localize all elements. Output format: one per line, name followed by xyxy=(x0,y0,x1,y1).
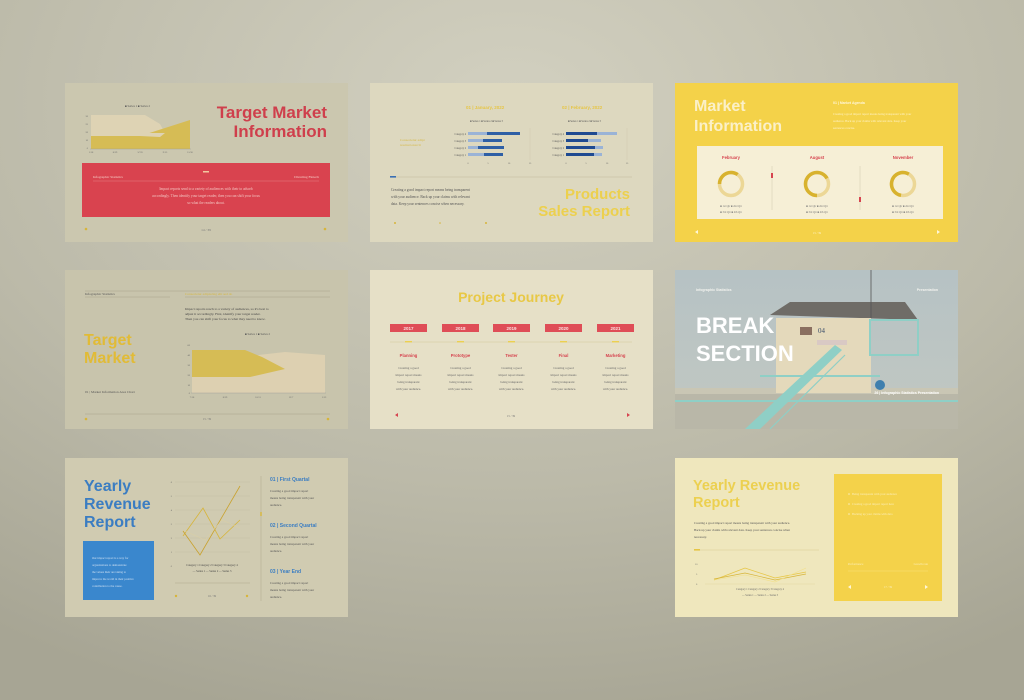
slide: target market xyxy=(65,270,348,429)
slide: yearly revenue report yellow: Creating a good impact report means being transparent with your audience. xyxy=(694,521,790,525)
bar charts: Category 4 xyxy=(553,133,565,136)
area chart: ■ Series 1 ■ Series 2 xyxy=(245,332,271,336)
red panel: Infographic Statistics xyxy=(93,175,123,179)
area chart: 20 xyxy=(188,374,191,377)
donut panel: February xyxy=(722,155,741,160)
timeline: Creating a good xyxy=(501,366,522,370)
line chart: Category 1 Category 2 Category 3 Category 4 xyxy=(186,564,238,567)
slide: target market: Then you can shift your focus to what they need to know. xyxy=(185,317,266,321)
line chart: 6 xyxy=(171,481,173,484)
line chart: Category 1 Category 2 Category 3 Category 4 xyxy=(736,588,785,591)
area chart: 10 xyxy=(86,139,89,142)
donut panel: ■ 3rd Qtr ■ 4th Qtr xyxy=(892,211,914,214)
area chart: 60 xyxy=(188,344,191,347)
yellow box: Being transparent with your audience xyxy=(852,492,898,496)
slide: market information: 01 | Market Agenda xyxy=(833,101,865,105)
quarters text xyxy=(270,477,317,599)
bar charts: 10 xyxy=(508,162,511,165)
timeline: impact report means xyxy=(550,373,577,377)
donut panel xyxy=(697,146,943,219)
timeline: impact report means xyxy=(602,373,629,377)
slide: break section photo: SECTION xyxy=(696,341,794,366)
timeline: Marketing xyxy=(606,353,626,358)
timeline: being transparent xyxy=(604,380,627,384)
blue box: improve the world in their positive xyxy=(92,577,134,581)
bar charts: 5 xyxy=(487,162,489,165)
bar charts: 02 | February, 2022 xyxy=(562,105,603,110)
timeline: Planning xyxy=(400,353,418,358)
slide: break section photo: 26 | Infographic Statistics Presentation xyxy=(874,391,939,395)
timeline: being transparent xyxy=(449,380,472,384)
red panel: Diverting Fintech xyxy=(294,175,319,179)
line chart xyxy=(695,563,815,597)
slide: target market: adjust it accordingly. First, identify your target reader. xyxy=(185,312,261,317)
area chart: 10 xyxy=(188,384,191,387)
area chart: 1/18 xyxy=(89,151,94,154)
area chart: 25 xyxy=(86,123,89,126)
slide: market information xyxy=(675,83,958,242)
yellow box: Performance xyxy=(848,562,864,566)
slide: market information: Creating a good impact report means being transparent with your xyxy=(833,112,911,116)
donut panel: ■ 3rd Qtr ■ 4th Qtr xyxy=(806,211,828,214)
blue box: organizations to demonstrate xyxy=(92,563,127,567)
timeline: Creating a good xyxy=(605,366,626,370)
title: Market xyxy=(694,98,746,115)
line chart: 5 xyxy=(171,495,173,498)
area chart: 8/29 xyxy=(113,151,118,154)
area chart: 8/29 xyxy=(223,396,228,399)
line chart: 5 xyxy=(696,573,698,576)
area chart: 10/11 xyxy=(255,396,262,399)
area chart: 20 xyxy=(86,131,89,134)
timeline: impact report means xyxy=(447,373,474,377)
slide: break section photo: Infographic Statistics xyxy=(696,288,732,292)
slide: break section photo: Presentation xyxy=(917,288,938,292)
timeline: with your audience. xyxy=(396,387,421,391)
slide: project journey xyxy=(370,270,653,429)
line chart: 0 xyxy=(171,565,173,568)
timeline: Tester xyxy=(505,353,518,358)
yellow box: Creating a good impact report here xyxy=(852,502,895,506)
timeline: being transparent xyxy=(500,380,523,384)
area chart: 30 xyxy=(86,115,89,118)
yellow box: Growth rate xyxy=(914,562,929,566)
timeline: with your audience. xyxy=(603,387,628,391)
bar charts: ■ Series 1 ■ Series 2 ■ Series 3 xyxy=(568,120,601,123)
bar charts: 0 xyxy=(565,162,567,165)
slide: yearly revenue report yellow xyxy=(675,458,958,617)
area chart: 9/15 xyxy=(163,151,168,154)
quarters text: audience. xyxy=(270,503,282,507)
slide: break section photo xyxy=(675,270,958,429)
title: Yearly Revenue xyxy=(693,478,800,494)
bar charts: ■ Series 1 ■ Series 2 ■ Series 3 xyxy=(470,120,503,123)
donut panel: ■ 3rd Qtr ■ 4th Qtr xyxy=(720,211,742,214)
quarters text: audience. xyxy=(270,549,282,553)
line chart: 10 xyxy=(695,563,698,566)
timeline: 2018 xyxy=(455,326,466,331)
timeline: 2020 xyxy=(558,326,569,331)
slide: target market: Market xyxy=(84,350,136,367)
bar charts: Consectetur adipi xyxy=(400,138,425,142)
bar charts: Category 3 xyxy=(455,140,467,143)
quarters text: audience. xyxy=(270,595,282,599)
slide: yearly revenue report yellow: Back up your claims with relevant data. Keep your sentences concise when xyxy=(694,528,790,532)
red panel: Impact reports send to a variety of audiences with their to adsorb xyxy=(159,187,253,191)
line chart: 2 xyxy=(171,537,173,540)
yellow box: Backing up your claims with data xyxy=(852,512,893,516)
area chart: 7/18 xyxy=(190,396,195,399)
slide: market information: 15 / 39 xyxy=(813,231,822,235)
slide: products sales report: data. Keep your sentences concise when necessary. xyxy=(391,202,465,206)
bar charts xyxy=(400,105,629,165)
slide: yearly revenue report blue xyxy=(65,458,348,617)
bar charts: Category 2 xyxy=(553,147,565,150)
donut panel: ■ 1st Qtr ■ 2nd Qtr xyxy=(806,205,828,208)
slide: target market: Consectetur adipiscing elit sed do xyxy=(185,292,232,296)
quarters text: Creating a good impact report xyxy=(270,581,308,585)
quarters text: Creating a good impact report xyxy=(270,489,308,493)
timeline: impact report means xyxy=(498,373,525,377)
slide: products sales report: with your audience. Back up your claims with relevant xyxy=(391,195,470,199)
slide: target market information xyxy=(65,83,348,242)
blue box: Our impact report is a way for xyxy=(92,556,128,560)
slide: yearly revenue report blue: Revenue xyxy=(84,496,151,513)
timeline: impact report means xyxy=(395,373,422,377)
timeline: 2021 xyxy=(610,326,621,331)
timeline: being transparent xyxy=(552,380,575,384)
timeline: with your audience. xyxy=(448,387,473,391)
slide: target market: Infographic Statistics xyxy=(85,292,115,296)
line chart: 0 xyxy=(696,583,698,586)
bar charts: nostrud exercit xyxy=(400,143,421,147)
timeline: Prototype xyxy=(451,353,471,358)
red panel xyxy=(82,163,330,217)
area chart: 30 xyxy=(188,364,191,367)
body text: Creating a good impact report means being transparent xyxy=(391,188,470,192)
timeline: with your audience. xyxy=(499,387,524,391)
line chart: — Series 1 — Series 2 — Series 3 xyxy=(741,594,779,597)
slide: products sales report: Sales Report xyxy=(538,203,630,220)
timeline: with your audience. xyxy=(551,387,576,391)
area chart: 1/13 xyxy=(322,396,327,399)
quarters text: means being transparent with your xyxy=(270,496,315,500)
timeline: Final xyxy=(559,353,568,358)
bar charts: Category 1 xyxy=(455,154,467,157)
timeline xyxy=(390,324,634,391)
slide: yearly revenue report blue: 16 / 39 xyxy=(208,594,217,598)
quarters text: Creating a good impact report xyxy=(270,535,308,539)
title: Yearly xyxy=(84,478,131,495)
line chart: 3 xyxy=(171,523,173,526)
area chart: 12/7 xyxy=(289,396,294,399)
red panel: so what the readers about. xyxy=(187,201,225,205)
title: Target xyxy=(84,332,132,349)
quarters text: 03 | Year End xyxy=(270,569,301,575)
slide: market information: Information xyxy=(694,118,782,135)
area chart xyxy=(188,332,327,399)
slide: target market information: Information xyxy=(234,122,327,141)
timeline: Creating a good xyxy=(553,366,574,370)
blue box: the values their are taking to xyxy=(92,570,127,574)
slide: market information: audience. Back up your claims with relevant data. Keep your xyxy=(833,119,906,123)
slide: products sales report xyxy=(370,83,653,242)
quarters text: means being transparent with your xyxy=(270,588,315,592)
bar charts: Category 1 xyxy=(553,154,565,157)
area chart: 11/30 xyxy=(187,151,194,154)
timeline: being transparent xyxy=(397,380,420,384)
slide: project journey: 15 / 39 xyxy=(507,414,516,418)
timeline: 2019 xyxy=(506,326,517,331)
area chart: 40 xyxy=(188,354,191,357)
quarters text: 02 | Second Quartal xyxy=(270,523,317,529)
red panel: accordingly. Then identify your target reader, then you can shift your focus xyxy=(152,194,260,199)
bar charts: 5 xyxy=(585,162,587,165)
photo: lifeguard tower xyxy=(675,270,958,429)
bar charts: 15 xyxy=(626,162,629,165)
title: Target Market xyxy=(217,103,327,122)
bar charts: 10 xyxy=(606,162,609,165)
photo: lifeguard tower: 04 xyxy=(818,327,826,335)
footer nav: 14 / 39 xyxy=(201,228,211,232)
slide: yearly revenue report blue: Report xyxy=(84,514,136,531)
title: BREAK xyxy=(696,313,774,338)
slide: yearly revenue report yellow: Report xyxy=(693,495,740,511)
slide: target market: Impact reports reach to a variety of audiences, so it's best to xyxy=(185,307,269,312)
area chart: ■ Series 1 ■ Series 2 xyxy=(125,104,151,108)
quarters text: 01 | First Quartal xyxy=(270,477,310,483)
yellow box: 17 / 39 xyxy=(884,585,893,589)
area chart: 0 xyxy=(189,392,191,395)
bar charts: Category 2 xyxy=(455,147,467,150)
yellow box xyxy=(834,474,942,601)
title: Project Journey xyxy=(458,289,564,305)
slide: market information: sentences concise. xyxy=(833,126,855,130)
quarters text: means being transparent with your xyxy=(270,542,315,546)
blue box xyxy=(83,541,154,600)
area chart xyxy=(86,104,194,154)
area chart: 0 xyxy=(87,147,89,150)
timeline: Creating a good xyxy=(450,366,471,370)
blue box: contribution to the cause. xyxy=(92,584,123,588)
slide: target market: 01 | Market Information Area Chart xyxy=(85,390,135,394)
bar charts: 01 | January, 2022 xyxy=(466,105,505,110)
donut panel: ■ 1st Qtr ■ 2nd Qtr xyxy=(720,205,742,208)
line chart: 1 xyxy=(171,551,173,554)
donut panel: August xyxy=(810,155,825,160)
line chart: — Series 1 — Series 2 — Series 3 xyxy=(192,570,232,573)
line chart xyxy=(171,481,250,573)
timeline: Creating a good xyxy=(398,366,419,370)
bar charts: 15 xyxy=(529,162,532,165)
title: Products xyxy=(565,186,630,203)
area chart: 3/7/8 xyxy=(137,151,143,154)
bar charts: Category 4 xyxy=(455,133,467,136)
line chart: 4 xyxy=(171,509,173,512)
slide: target market: 15 / 39 xyxy=(203,417,212,421)
donut panel: ■ 1st Qtr ■ 2nd Qtr xyxy=(892,205,914,208)
bar charts: Category 3 xyxy=(553,140,565,143)
slide: yearly revenue report yellow: necessary. xyxy=(694,535,707,539)
timeline: 2017 xyxy=(403,326,414,331)
bar charts: 0 xyxy=(467,162,469,165)
donut panel: November xyxy=(893,155,914,160)
